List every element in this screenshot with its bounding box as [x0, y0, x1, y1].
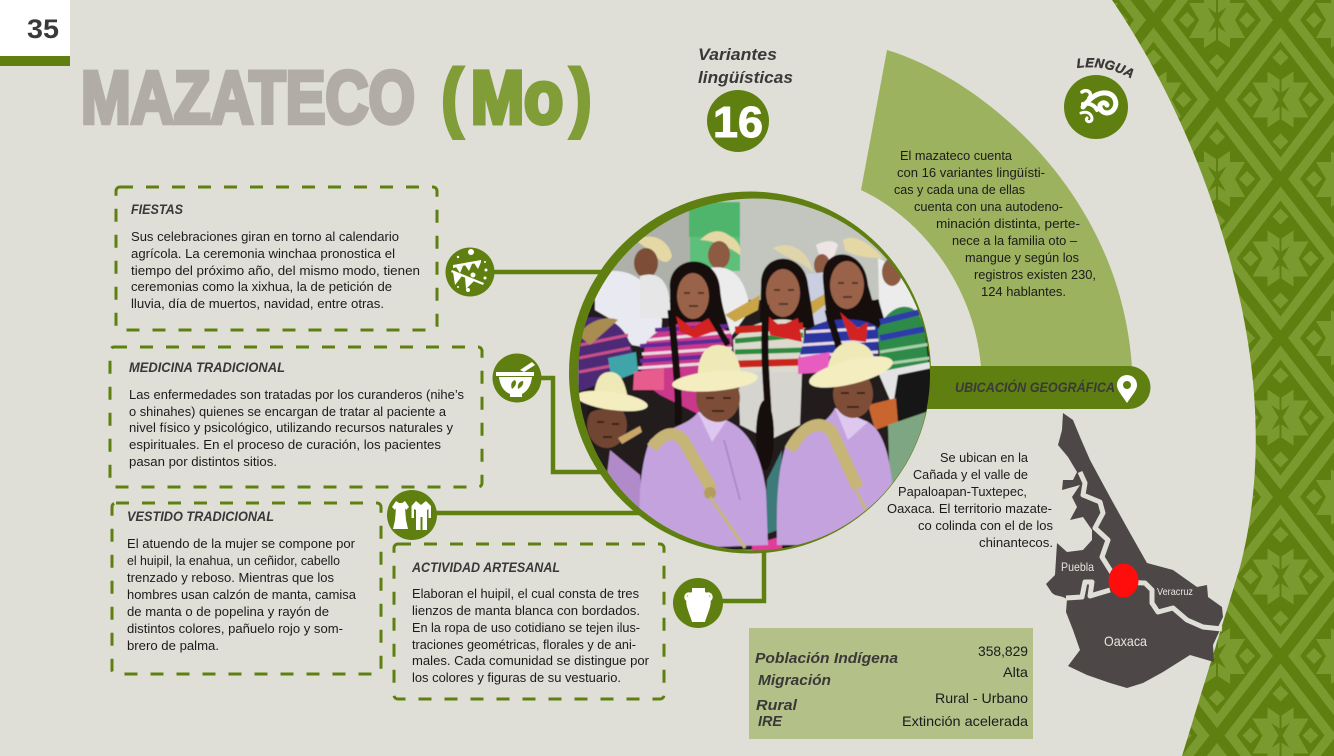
- ubicación bar: UBICACIÓN GEOGRÁFICA: [955, 378, 1115, 395]
- lengua text block: cas y cada una de ellas: [894, 182, 1025, 197]
- text: medicina: nivel físico y psicológico, utilizando recursos naturales y: [129, 420, 453, 435]
- lengua label: LENGUA: [1077, 58, 1134, 78]
- text: fiestas: ceremonias como la xixhua, la de petición de: [131, 279, 392, 294]
- row values: Alta: [1003, 664, 1028, 680]
- location marker: [1108, 564, 1138, 598]
- lengua text block: registros existen 230,: [974, 267, 1096, 282]
- text: vestido: hombres usan calzón de manta, camisa: [127, 587, 357, 602]
- lengua text block: [894, 148, 1096, 299]
- text: artesanal: [412, 586, 650, 685]
- location text block: Cañada y el valle de: [913, 467, 1028, 482]
- woman 3: [822, 254, 879, 328]
- text: vestido: brero de palma.: [127, 638, 219, 653]
- title: (: [442, 55, 462, 138]
- text: artesanal: los colores y figuras de su vestuario.: [412, 670, 621, 685]
- ubicación bar: [925, 366, 1150, 409]
- text: medicina: o shinahes) quienes se encargan de tratar al paciente a: [129, 404, 447, 419]
- lengua text block: con 16 variantes lingüísti-: [897, 165, 1045, 180]
- lengua text block: mangue y según los: [965, 250, 1079, 265]
- heading: fiestas: FIESTAS: [131, 202, 183, 217]
- location text block: Papaloapan-Tuxtepec,: [898, 484, 1027, 499]
- wall: [570, 195, 940, 555]
- left white blob: [595, 271, 662, 350]
- panel: fiestas: [116, 187, 437, 330]
- left blouse: [578, 317, 637, 392]
- variantes count badge: 16: [713, 98, 763, 147]
- icon: lengua swirl: [1064, 75, 1128, 139]
- location text block: chinantecos.: [979, 535, 1053, 550]
- text: medicina: espirituales. En el proceso de curación, los pacientes: [129, 437, 441, 452]
- text: vestido: el huipil, la enahua, un ceñidor, cabello: [127, 553, 340, 568]
- heading: artesanal: ACTIVIDAD ARTESANAL: [411, 560, 560, 575]
- text: vestido: El atuendo de la mujer se compone por: [127, 536, 356, 551]
- location text block: Se ubican en la: [940, 450, 1029, 465]
- text: artesanal: males. Cada comunidad se distingue por: [412, 653, 650, 668]
- icon: fiesta bunting: [446, 248, 494, 296]
- panel: medicina tradicional: [110, 347, 482, 487]
- row labels: Población Indígena: [755, 651, 898, 667]
- panel: vestido tradicional: [112, 503, 381, 674]
- map: [1046, 413, 1223, 688]
- lengua text block: minación distinta, perte-: [936, 216, 1080, 231]
- title: ): [571, 55, 591, 138]
- title: MAZATECO: [81, 56, 415, 139]
- text: vestido: trenzado y reboso. Mientras que los: [127, 570, 334, 585]
- woman 2: [760, 259, 815, 328]
- text: fiestas: lluvia, día de muertos, navidad, entre otras.: [131, 296, 384, 311]
- row values: Extinción acelerada: [902, 713, 1028, 729]
- text: vestido: [127, 536, 357, 653]
- icon: location pin: [1117, 375, 1137, 403]
- text: medicina: Las enfermedades son tratadas por los curanderos (nihe’s: [129, 387, 464, 402]
- lengua text block: nece a la familia oto –: [952, 233, 1078, 248]
- lower dark base: [578, 300, 930, 550]
- text: medicina: [129, 387, 464, 469]
- text: artesanal: traciones geométricas, florales y de ani-: [412, 637, 636, 652]
- text: artesanal: Elaboran el huipil, el cual consta de tres: [412, 586, 639, 601]
- variantes heading: Variantes: [698, 45, 777, 64]
- icon: traditional clothing: [387, 490, 437, 540]
- panel: lengua sector: [861, 50, 1132, 367]
- panel: actividad artesanal: [394, 544, 664, 699]
- text: vestido: distintos colores, pañuelo rojo y som-: [127, 621, 343, 636]
- text: fiestas: tiempo del próximo año, del mismo modo, tienen: [131, 263, 420, 278]
- background musicians: [636, 237, 672, 262]
- map labels: Puebla: [1061, 560, 1094, 574]
- location text block: co colinda con el de los: [918, 518, 1053, 533]
- text: vestido: de manta o de popelina y rayón de: [127, 604, 329, 619]
- central photo: [569, 192, 940, 556]
- data table: [749, 628, 1033, 739]
- heading: medicina: MEDICINA TRADICIONAL: [129, 360, 285, 375]
- text: fiestas: agrícola. La ceremonia winchaa pronostica el: [131, 246, 395, 261]
- row labels: Migración: [758, 673, 831, 689]
- text: fiestas: [131, 229, 420, 311]
- row labels: [755, 651, 898, 730]
- woman 1: [669, 261, 731, 334]
- variantes count badge: [707, 90, 769, 152]
- textile pattern band: [1112, 0, 1334, 756]
- man 2 shirt/orange accents: [868, 398, 898, 430]
- connector lines: [430, 272, 764, 601]
- lengua text block: El mazateco cuenta: [900, 148, 1013, 163]
- variantes heading: [698, 45, 793, 87]
- lengua text block: 124 hablantes.: [981, 284, 1066, 299]
- row values: 358,829: [978, 643, 1028, 659]
- row labels: IRE: [758, 714, 783, 730]
- title: Mo: [471, 56, 563, 139]
- lengua text block: cuenta con una autodeno-: [914, 199, 1063, 214]
- location text block: Oaxaca. El territorio mazate-: [887, 501, 1052, 516]
- icon: mortar and pestle: [492, 354, 542, 402]
- icon: clay jar: [673, 578, 723, 628]
- map labels: [1061, 560, 1193, 649]
- row labels: Rural: [756, 698, 798, 714]
- right blouse: [877, 306, 929, 370]
- man 3: [587, 402, 627, 448]
- man 1: [639, 412, 768, 550]
- text: medicina: pasan por distintos sitios.: [129, 454, 277, 469]
- text: artesanal: En la ropa de uso cotidiano se tejen ilus-: [412, 620, 640, 635]
- map labels: Veracruz: [1157, 587, 1193, 598]
- text: artesanal: lienzos de manta blanca con bordados.: [412, 603, 640, 618]
- page number tab: 35: [27, 14, 59, 44]
- heading: vestido: VESTIDO TRADICIONAL: [127, 509, 274, 524]
- text: fiestas: Sus celebraciones giran en torno al calendario: [131, 229, 399, 244]
- variantes heading: lingüísticas: [698, 68, 793, 87]
- location text block: [887, 450, 1053, 550]
- row values: Rural - Urbano: [935, 690, 1028, 706]
- row values: [902, 643, 1028, 729]
- page number tab: [0, 0, 70, 66]
- man 2: [777, 408, 893, 545]
- map labels: Oaxaca: [1104, 633, 1147, 649]
